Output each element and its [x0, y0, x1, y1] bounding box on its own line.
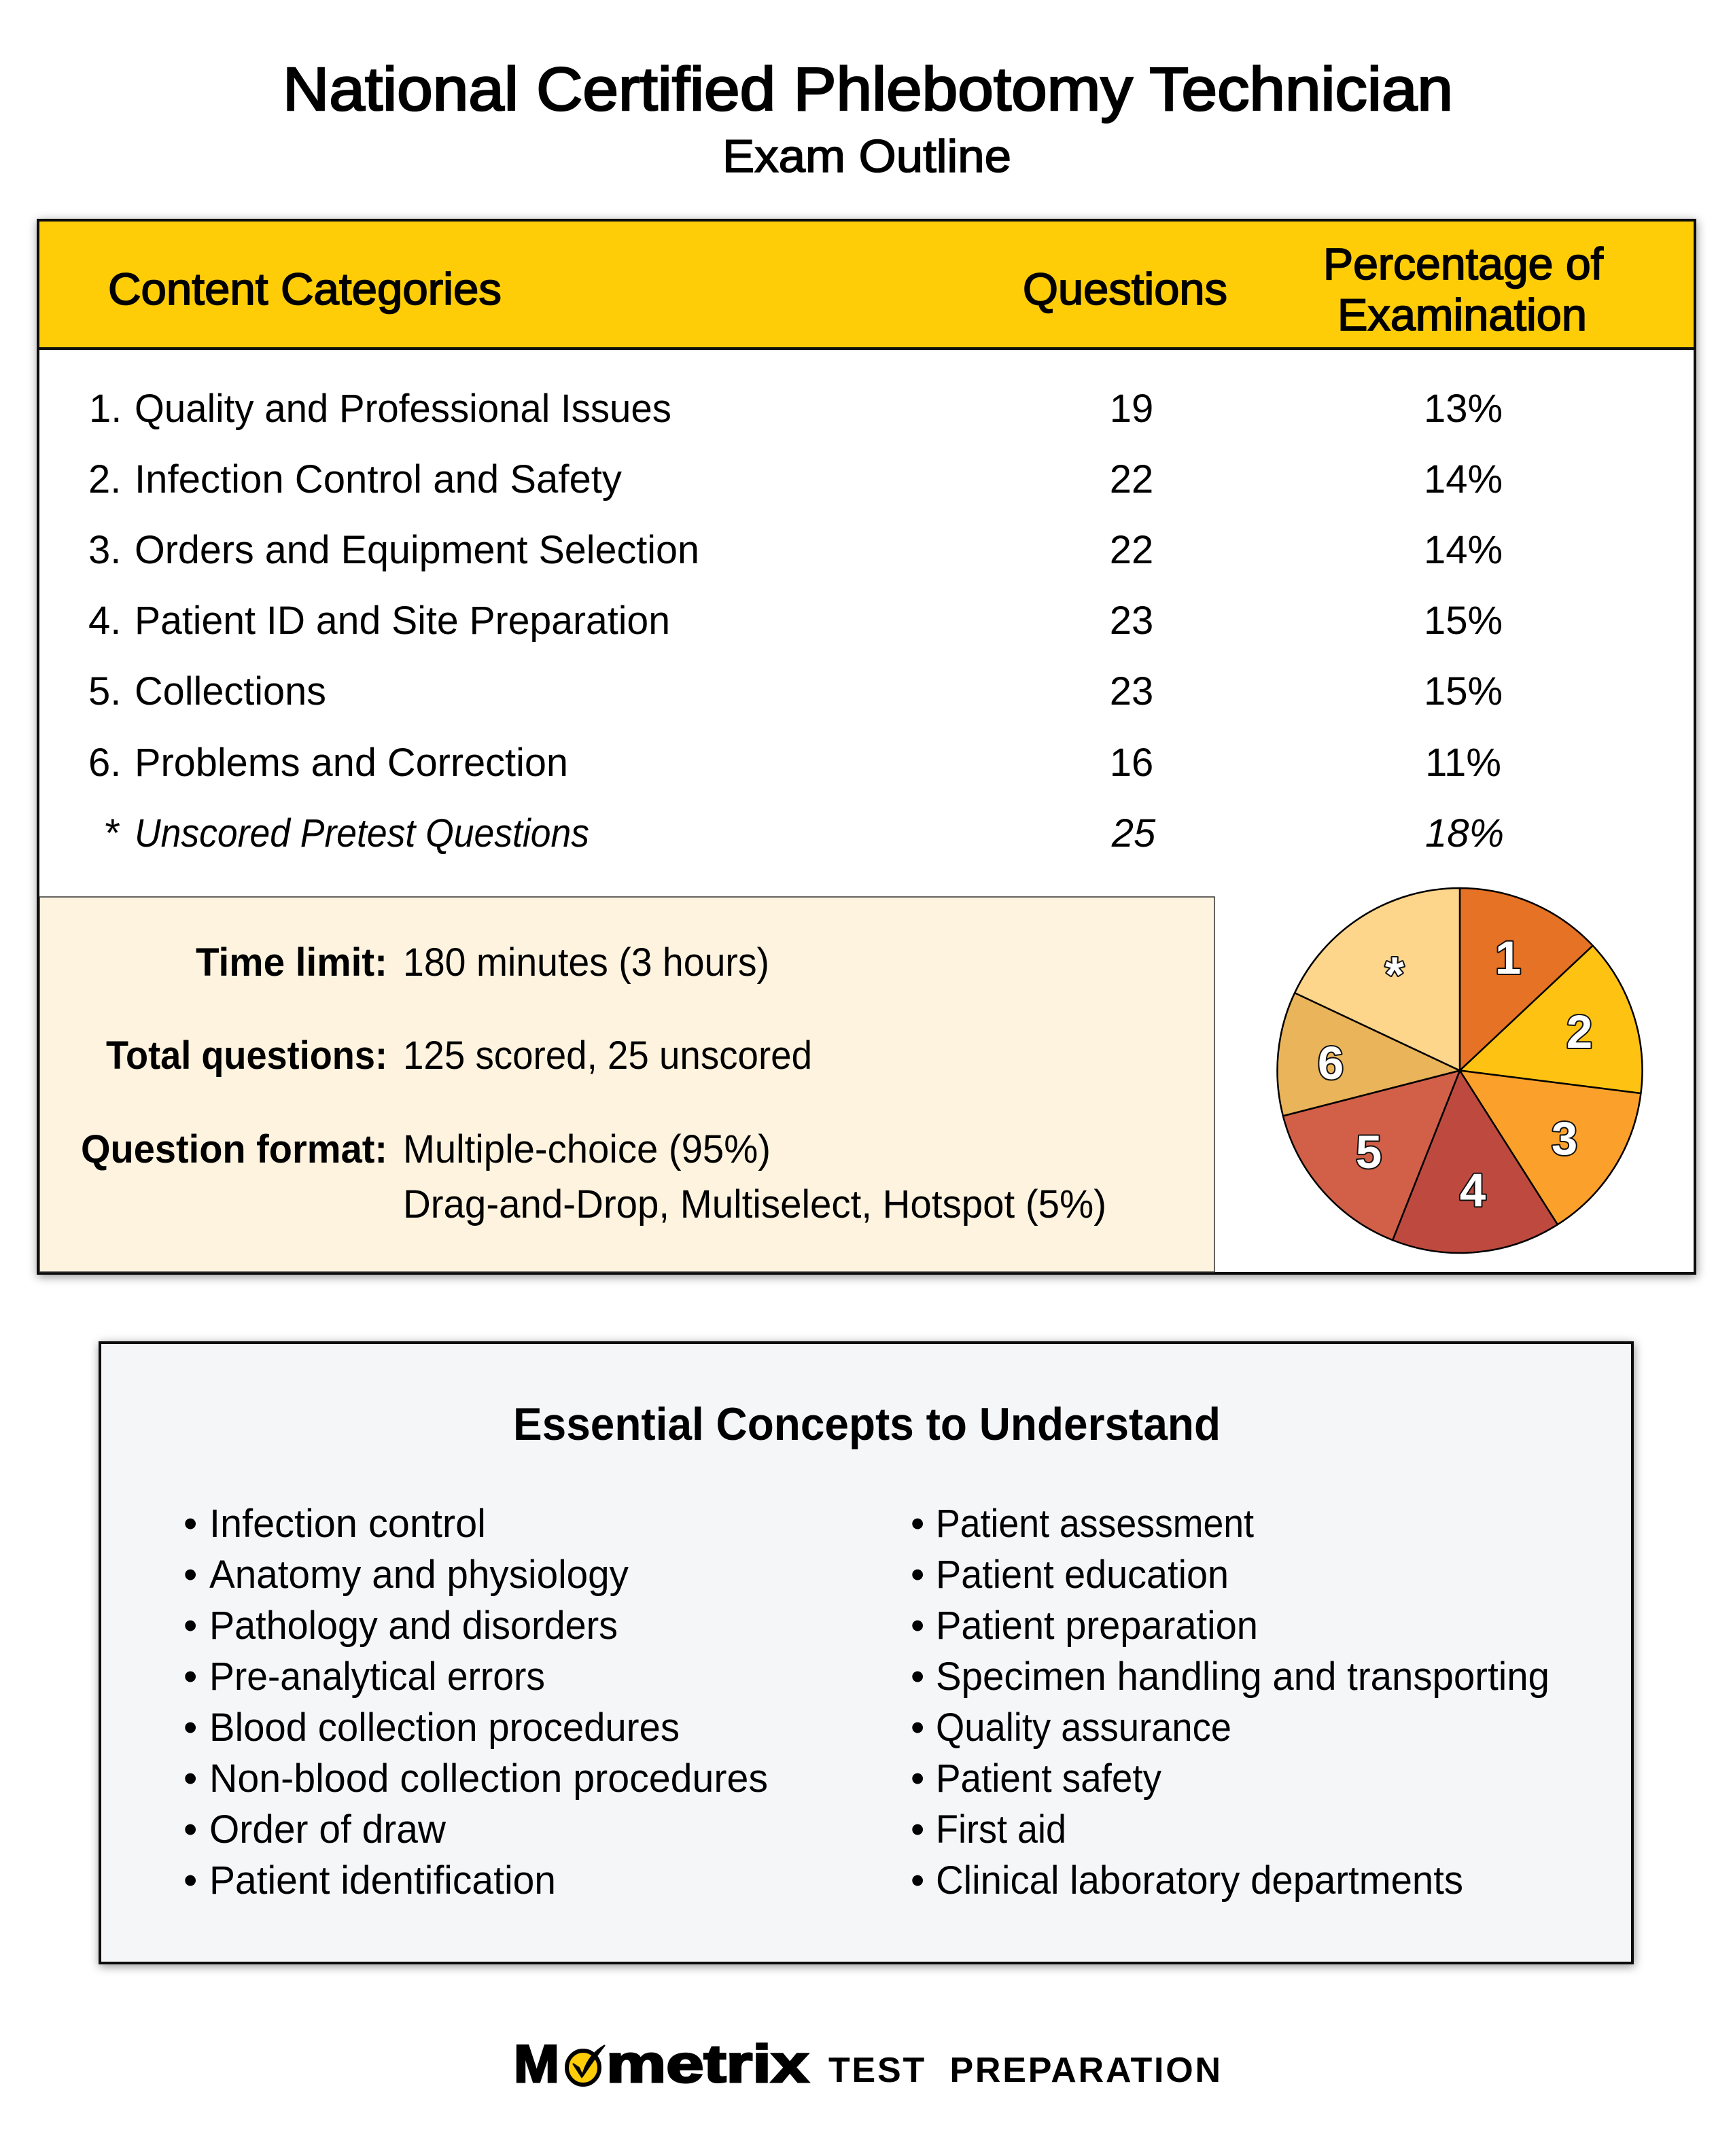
- time limit: [196, 940, 769, 985]
- concepts list: left column: •: [183, 1604, 197, 1648]
- row 6: 16: [1110, 741, 1153, 785]
- question format: Multiple-choice (95%): [403, 1127, 771, 1171]
- row 2: 14%: [1424, 457, 1503, 501]
- row 1: [89, 387, 1503, 431]
- time limit: Time limit:: [196, 940, 387, 985]
- concepts list: left column: •: [183, 1655, 197, 1699]
- subtitle: Exam Outline: [722, 130, 1011, 182]
- concepts list: left column: Patient identification: [209, 1858, 556, 1903]
- row 6: [88, 741, 1501, 785]
- concepts list: left column: Infection control: [209, 1502, 486, 1546]
- pie labels: *: [1385, 948, 1404, 1002]
- row 1: 13%: [1424, 387, 1503, 431]
- row: unscored pretest questions: 18%: [1425, 811, 1504, 855]
- concepts list: right column: Clinical laboratory departments: [936, 1858, 1463, 1903]
- row 1: 19: [1110, 387, 1153, 431]
- row 4: 23: [1110, 599, 1153, 643]
- logo wordmark metrix: metrix: [606, 2034, 809, 2093]
- question format: Question format:: [81, 1127, 387, 1171]
- time limit: 180 minutes (3 hours): [403, 940, 769, 985]
- pie labels: 2: [1566, 1006, 1592, 1058]
- row 6: Problems and Correction: [135, 741, 568, 785]
- table header band: [39, 222, 1694, 350]
- row 1: 1.: [89, 387, 122, 431]
- pie labels: [1318, 932, 1592, 1216]
- row 4: [88, 599, 1503, 643]
- row: unscored pretest questions: *: [103, 811, 120, 855]
- row 4: Patient ID and Site Preparation: [135, 599, 670, 643]
- concepts list: right column: First aid: [936, 1807, 1066, 1852]
- question format: [81, 1127, 1106, 1226]
- header: percentage of examination: [1323, 238, 1604, 340]
- logo: Mometrix Test Preparation: [514, 2034, 1221, 2093]
- icon: check mark in yellow circle: [567, 2045, 605, 2085]
- row 2: [88, 457, 1503, 501]
- total questions: [106, 1033, 812, 1078]
- concepts list: right column: Patient education: [936, 1553, 1229, 1597]
- concepts list: left column: •: [183, 1706, 197, 1750]
- concepts list: right column: •: [911, 1807, 924, 1852]
- concepts list: left column: •: [183, 1858, 197, 1903]
- concepts list: left column: •: [183, 1553, 197, 1597]
- row 3: 22: [1110, 528, 1153, 572]
- concepts list: left column: •: [183, 1756, 197, 1801]
- pie labels: 5: [1356, 1126, 1382, 1178]
- pie labels: 3: [1552, 1112, 1577, 1165]
- concepts list: left column: Non-blood collection procedures: [209, 1756, 768, 1801]
- header: percentage of examination: Examination: [1337, 289, 1587, 340]
- row 5: 15%: [1424, 669, 1503, 713]
- pie labels: 4: [1460, 1164, 1486, 1216]
- row 2: 2.: [88, 457, 121, 501]
- concepts list: right column: •: [911, 1502, 924, 1546]
- pie labels: 6: [1318, 1037, 1344, 1089]
- row 6: 6.: [88, 741, 121, 785]
- row 5: Collections: [135, 669, 326, 713]
- concepts list: right column: •: [911, 1858, 924, 1903]
- concepts list: left column: Pathology and disorders: [209, 1604, 618, 1648]
- table rows: [88, 387, 1504, 855]
- concepts list: left column: Anatomy and physiology: [209, 1553, 629, 1597]
- concepts list: right column: [911, 1502, 1550, 1903]
- row: unscored pretest questions: [103, 811, 1504, 855]
- row 2: Infection Control and Safety: [135, 457, 622, 501]
- concepts list: right column: Patient safety: [936, 1756, 1161, 1801]
- panel: exam outline table: [38, 220, 1695, 1273]
- logo tagline: TEST PREPARATION: [828, 2051, 1221, 2090]
- question format: Drag-and-Drop, Multiselect, Hotspot (5%): [403, 1182, 1106, 1226]
- header: percentage of examination: Percentage of: [1323, 238, 1604, 289]
- concepts list: right column: •: [911, 1553, 924, 1597]
- concepts list: left column: •: [183, 1807, 197, 1852]
- heading: essential concepts: Essential Concepts to Understand: [513, 1398, 1221, 1450]
- row 3: [88, 528, 1503, 572]
- total questions: 125 scored, 25 unscored: [403, 1033, 812, 1078]
- concepts list: left column: Pre-analytical errors: [209, 1655, 545, 1699]
- main title: National Certified Phlebotomy Technician: [283, 56, 1453, 124]
- panel: exam facts: [39, 897, 1214, 1272]
- row 5: 5.: [88, 669, 121, 713]
- row: unscored pretest questions: 25: [1111, 811, 1156, 855]
- concepts list: right column: Quality assurance: [936, 1706, 1231, 1750]
- panel: essential concepts: [100, 1343, 1632, 1963]
- row 4: 15%: [1424, 599, 1503, 643]
- concepts list: right column: •: [911, 1604, 924, 1648]
- concepts list: right column: •: [911, 1706, 924, 1750]
- title: [283, 56, 1453, 182]
- row 1: Quality and Professional Issues: [135, 387, 671, 431]
- row 3: 14%: [1424, 528, 1503, 572]
- row 3: Orders and Equipment Selection: [135, 528, 699, 572]
- header: questions: Questions: [1023, 264, 1227, 314]
- concepts list: left column: [183, 1502, 768, 1903]
- concepts list: right column: •: [911, 1655, 924, 1699]
- concepts list: right column: Patient preparation: [936, 1604, 1258, 1648]
- pie labels: 1: [1495, 932, 1521, 984]
- row 4: 4.: [88, 599, 121, 643]
- header: content categories: Content Categories: [108, 264, 502, 314]
- total questions: Total questions:: [106, 1033, 387, 1078]
- logo wordmark M: M: [514, 2034, 559, 2093]
- row 5: [88, 669, 1503, 713]
- concepts list: right column: •: [911, 1756, 924, 1801]
- row 2: 22: [1110, 457, 1153, 501]
- concepts list: left column: •: [183, 1502, 197, 1546]
- concepts list: right column: Patient assessment: [936, 1502, 1254, 1546]
- row 5: 23: [1110, 669, 1153, 713]
- row 3: 3.: [88, 528, 121, 572]
- concepts list: left column: Order of draw: [209, 1807, 447, 1852]
- table frame: [38, 220, 1695, 1273]
- pie chart: [1277, 888, 1643, 1253]
- row: unscored pretest questions: Unscored Pretest Questions: [135, 811, 589, 855]
- row 6: 11%: [1425, 741, 1501, 785]
- concepts list: right column: Specimen handling and transporting: [936, 1655, 1550, 1699]
- concepts list: left column: Blood collection procedures: [209, 1706, 680, 1750]
